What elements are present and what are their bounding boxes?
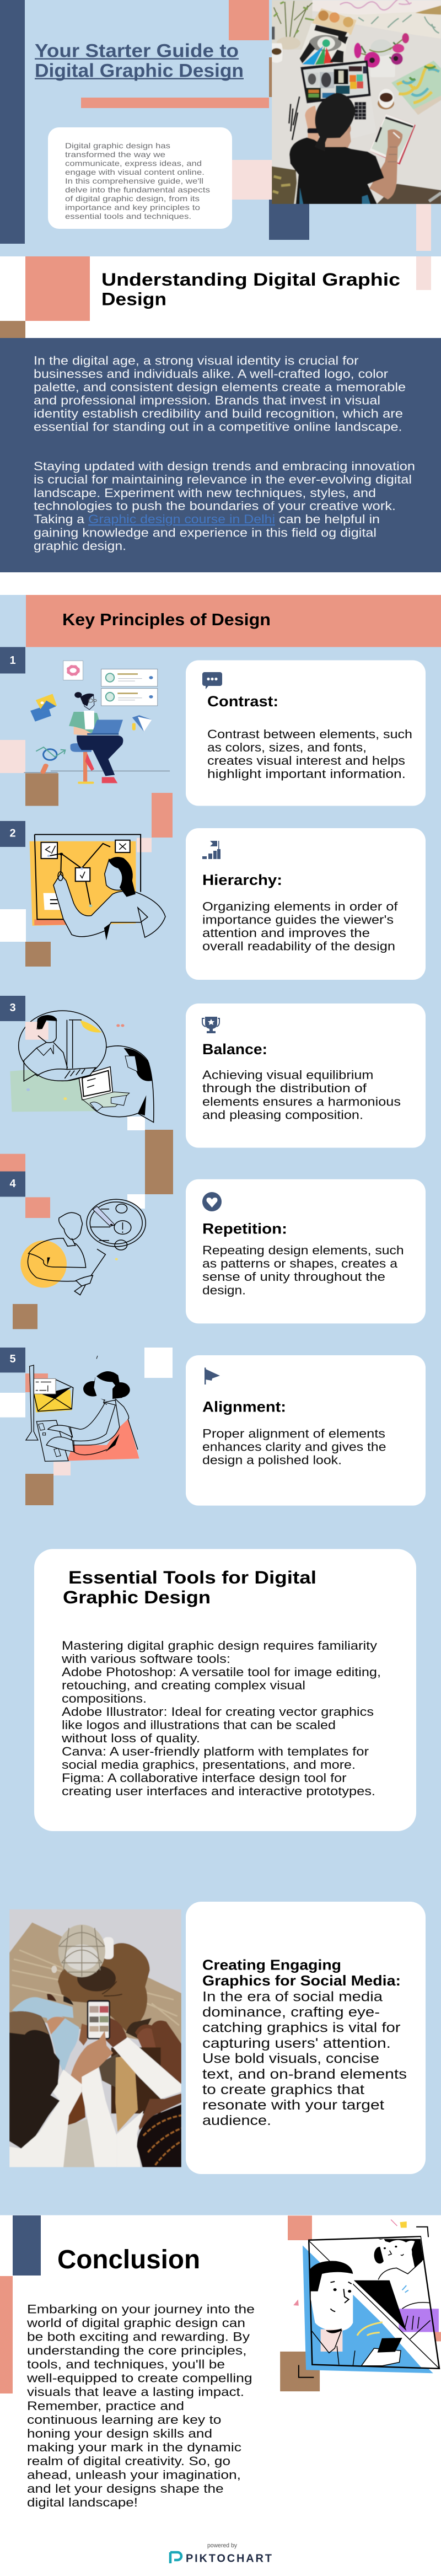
card 3: balance [186,1003,426,1148]
tools list: with various software tools: [61,1652,230,1666]
intro card: of digital graphic design, from its [65,194,200,203]
title [35,41,244,82]
conclusion text: realm of digital creativity. So, go [27,2454,230,2468]
card 2: hierarchy: importance guides the viewer's [202,913,394,926]
heading: essential tools: Essential Tools for Digital [68,1568,316,1587]
icon: speech bubble [202,672,222,689]
intro card: essential tools and techniques. [65,212,191,221]
illustration: man with phone in frame [280,2220,441,2391]
photo: friends looking at phone [9,1909,181,2167]
card: social media graphics: text, and on-brand elements [202,2067,407,2082]
number badge 3: 3 [9,1002,16,1014]
conclusion text: world of digital graphic design can [26,2316,245,2330]
illustration 4: man with magnifying glass [20,1199,146,1295]
panel: visual identity text [0,338,441,572]
card: social media graphics: to create graphics that [202,2082,364,2097]
card: social media graphics [186,1902,426,2174]
icon: flag [205,1367,220,1384]
number badge 3 [0,996,25,1021]
conclusion text: digital landscape! [27,2496,138,2509]
number badge 5: 5 [9,1353,16,1365]
conclusion text: well-equipped to create compelling [26,2371,252,2385]
number badge 4: 4 [9,1178,16,1190]
heading: essential tools: Graphic Design [63,1587,211,1607]
card 2: hierarchy: Organizing elements in order of [202,899,398,913]
heading: essential tools [63,1568,316,1607]
panel: visual identity text: palette, and consistent design elements create a memorable [34,380,406,394]
panel: visual identity text: gaining knowledge and experience in this field og digital [34,525,377,539]
heading: creating engaging graphics: Graphics for Social Media: [202,1972,401,1989]
intro card: Digital graphic design has [65,141,170,150]
card 3: balance: through the distribution of [202,1081,367,1095]
card 1: contrast: Contrast between elements, such [207,727,412,741]
number badge 1 [0,647,25,674]
icon: hierarchy bars and flag [202,841,220,859]
panel: visual identity text: In the digital age, a strong visual identity is crucial for [34,353,358,367]
tools list: Canva: A user-friendly platform with templates for [62,1745,369,1758]
intro card: transformed the way we [65,150,165,159]
card 5: alignment: Proper alignment of elements [202,1426,385,1440]
conclusion text: be both exciting and rewarding. By [27,2330,250,2343]
conclusion text: and let your designs shape the [27,2482,224,2496]
tools list: creating user interfaces and interactive prototypes. [62,1784,375,1798]
number badge 5 [0,1348,25,1372]
card 3: balance: Achieving visual equilibrium [202,1068,374,1082]
intro card: communicate, express ideas, and [65,159,202,168]
card 5: alignment: enhances clarity and gives the [202,1440,386,1453]
card: social media graphics: capturing users' attention. [202,2036,391,2051]
card 5: alignment [186,1355,426,1506]
card 2: hierarchy: Hierarchy: [202,872,282,888]
panel: visual identity text: can be helpful in [279,512,380,526]
panel: essential tools [34,1549,416,1831]
card 3: balance: Balance: [202,1041,267,1058]
conclusion text: tools, and techniques, you'll be [27,2357,225,2371]
tools list: Figma: A collaborative interface design tool for [62,1771,347,1785]
intro card: In this comprehensive guide, we'll [65,176,203,185]
heading: understanding [101,270,400,309]
footer: powered by piktochart: powered by [207,2542,237,2549]
conclusion text: continuous learning are key to [27,2413,222,2427]
card 4: repetition: as patterns or shapes, creates a [202,1257,398,1270]
card: social media graphics: In the era of social media [202,1989,383,2004]
card 1: contrast: highlight important information. [207,767,406,781]
card 4: repetition [186,1179,426,1323]
conclusion text: Remember, practice and [27,2399,184,2413]
card 4: repetition: sense of unity throughout the [202,1270,385,1284]
card 3: balance: elements ensures a harmonious [202,1094,401,1108]
number badge 4 [0,1171,25,1196]
card: social media graphics: catching graphics is vital for [202,2020,400,2036]
card 4: repetition: Repeating design elements, such [202,1243,404,1257]
card 1: contrast: creates visual interest and helps [207,754,405,768]
illustration 2: woman connecting wireframe [30,835,165,940]
panel: visual identity text: businesses and individuals alike. A well-crafted logo, color [34,367,388,380]
panel: visual identity text: Graphic design course in Delhi [88,512,275,526]
heading: creating engaging graphics [202,1957,401,1989]
number badge 2: 2 [9,827,16,839]
card 4: repetition: Repetition: [202,1221,287,1237]
illustration 5: woman typing with email [26,1356,139,1461]
heading band: key principles: Key Principles of Design [62,610,271,629]
number badge 2 [0,821,25,847]
card: social media graphics: audience. [202,2113,271,2128]
tools list: without loss of quality. [61,1731,200,1745]
heading band: key principles [26,595,441,647]
conclusion text: ahead, unleash your imagination, [27,2468,241,2482]
number badge 1: 1 [9,654,16,667]
card 1: contrast [186,661,426,806]
conclusion text: visuals that leave a lasting impact. [27,2385,244,2399]
panel: visual identity text: Staying updated with design trends and embracing innovation [34,459,415,473]
tools list: like logos and illustrations that can be scaled [62,1718,336,1732]
conclusion text [26,2303,255,2509]
tools list [61,1639,381,1798]
tools list: Adobe Photoshop: A versatile tool for image editing, [62,1665,381,1679]
intro card [48,127,232,229]
tools list: Mastering digital graphic design requires familiarity [62,1639,377,1652]
intro card: importance and key principles to [65,203,200,212]
card: social media graphics: resonate with your target [202,2097,384,2113]
footer: powered by piktochart [170,2542,272,2565]
conclusion text: honing your design skills and [27,2427,212,2440]
icon: heart in circle [202,1192,222,1211]
panel: hero [0,0,441,251]
panel: visual identity text: landscape. Experiment with new techniques, styles, and [34,486,376,500]
panel: visual identity text: is crucial for maintaining relevance in the ever-evolving digital [34,473,412,486]
title: Digital Graphic Design [35,61,244,82]
card: social media graphics: Use bold visuals, concise [202,2051,379,2067]
panel: visual identity text: essential for standing out in a competitive online landscape. [34,420,402,433]
panel: understanding digital graphic design header [0,256,441,338]
tools list: Adobe Illustrator: Ideal for creating vector graphics [62,1705,374,1719]
panel: visual identity text: and professional impression. Brands that invest in visual [34,393,380,407]
conclusion text: understanding the core principles, [27,2343,247,2357]
card 2: hierarchy: attention and improves the [202,926,370,940]
heading: understanding: Design [101,289,166,309]
heading: understanding: Understanding Digital Graphic [101,270,400,289]
panel: visual identity text: Taking a [34,512,85,526]
tools list: social media graphics, presentations, and more. [62,1758,356,1772]
illustration 1: woman with laptop on stool [24,661,170,784]
panel: visual identity text: graphic design. [34,539,126,552]
tools list: retouching, and creating complex visual [62,1678,305,1692]
panel: visual identity text: technologies to push the boundaries of your creative work. [34,499,396,513]
intro card: delve into the fundamental aspects [65,185,210,194]
conclusion text: making your mark in the dynamic [27,2440,241,2454]
tools list: compositions. [62,1692,147,1705]
title: Your Starter Guide to [35,41,239,62]
photo: designer at desk [272,0,441,204]
card 3: balance: and pleasing composition. [202,1108,363,1121]
heading: creating engaging graphics: Creating Engaging [202,1957,341,1973]
panel: visual identity text: identity establish credibility and build recognition, which are [34,406,403,420]
card: social media graphics: dominance, crafting eye- [202,2005,380,2020]
card 2: hierarchy: overall readability of the design [202,940,395,953]
card 5: alignment: Alignment: [202,1398,286,1415]
card 2: hierarchy [186,828,426,980]
heading: conclusion: Conclusion [57,2245,200,2274]
footer: powered by piktochart: PIKTOCHART [186,2553,272,2565]
card 1: contrast: as colors, sizes, and fonts, [207,740,367,754]
panel: conclusion [0,2215,441,2576]
card 4: repetition: design. [202,1283,246,1297]
card 1: contrast: Contrast: [207,693,278,710]
illustration 3: designers at computers [10,1011,154,1123]
intro card: engage with visual content online. [65,168,205,176]
conclusion text: Embarking on your journey into the [27,2303,255,2316]
card 5: alignment: design a polished look. [202,1453,342,1467]
icon: trophy [202,1017,219,1033]
icon: piktochart logo [170,2552,181,2563]
